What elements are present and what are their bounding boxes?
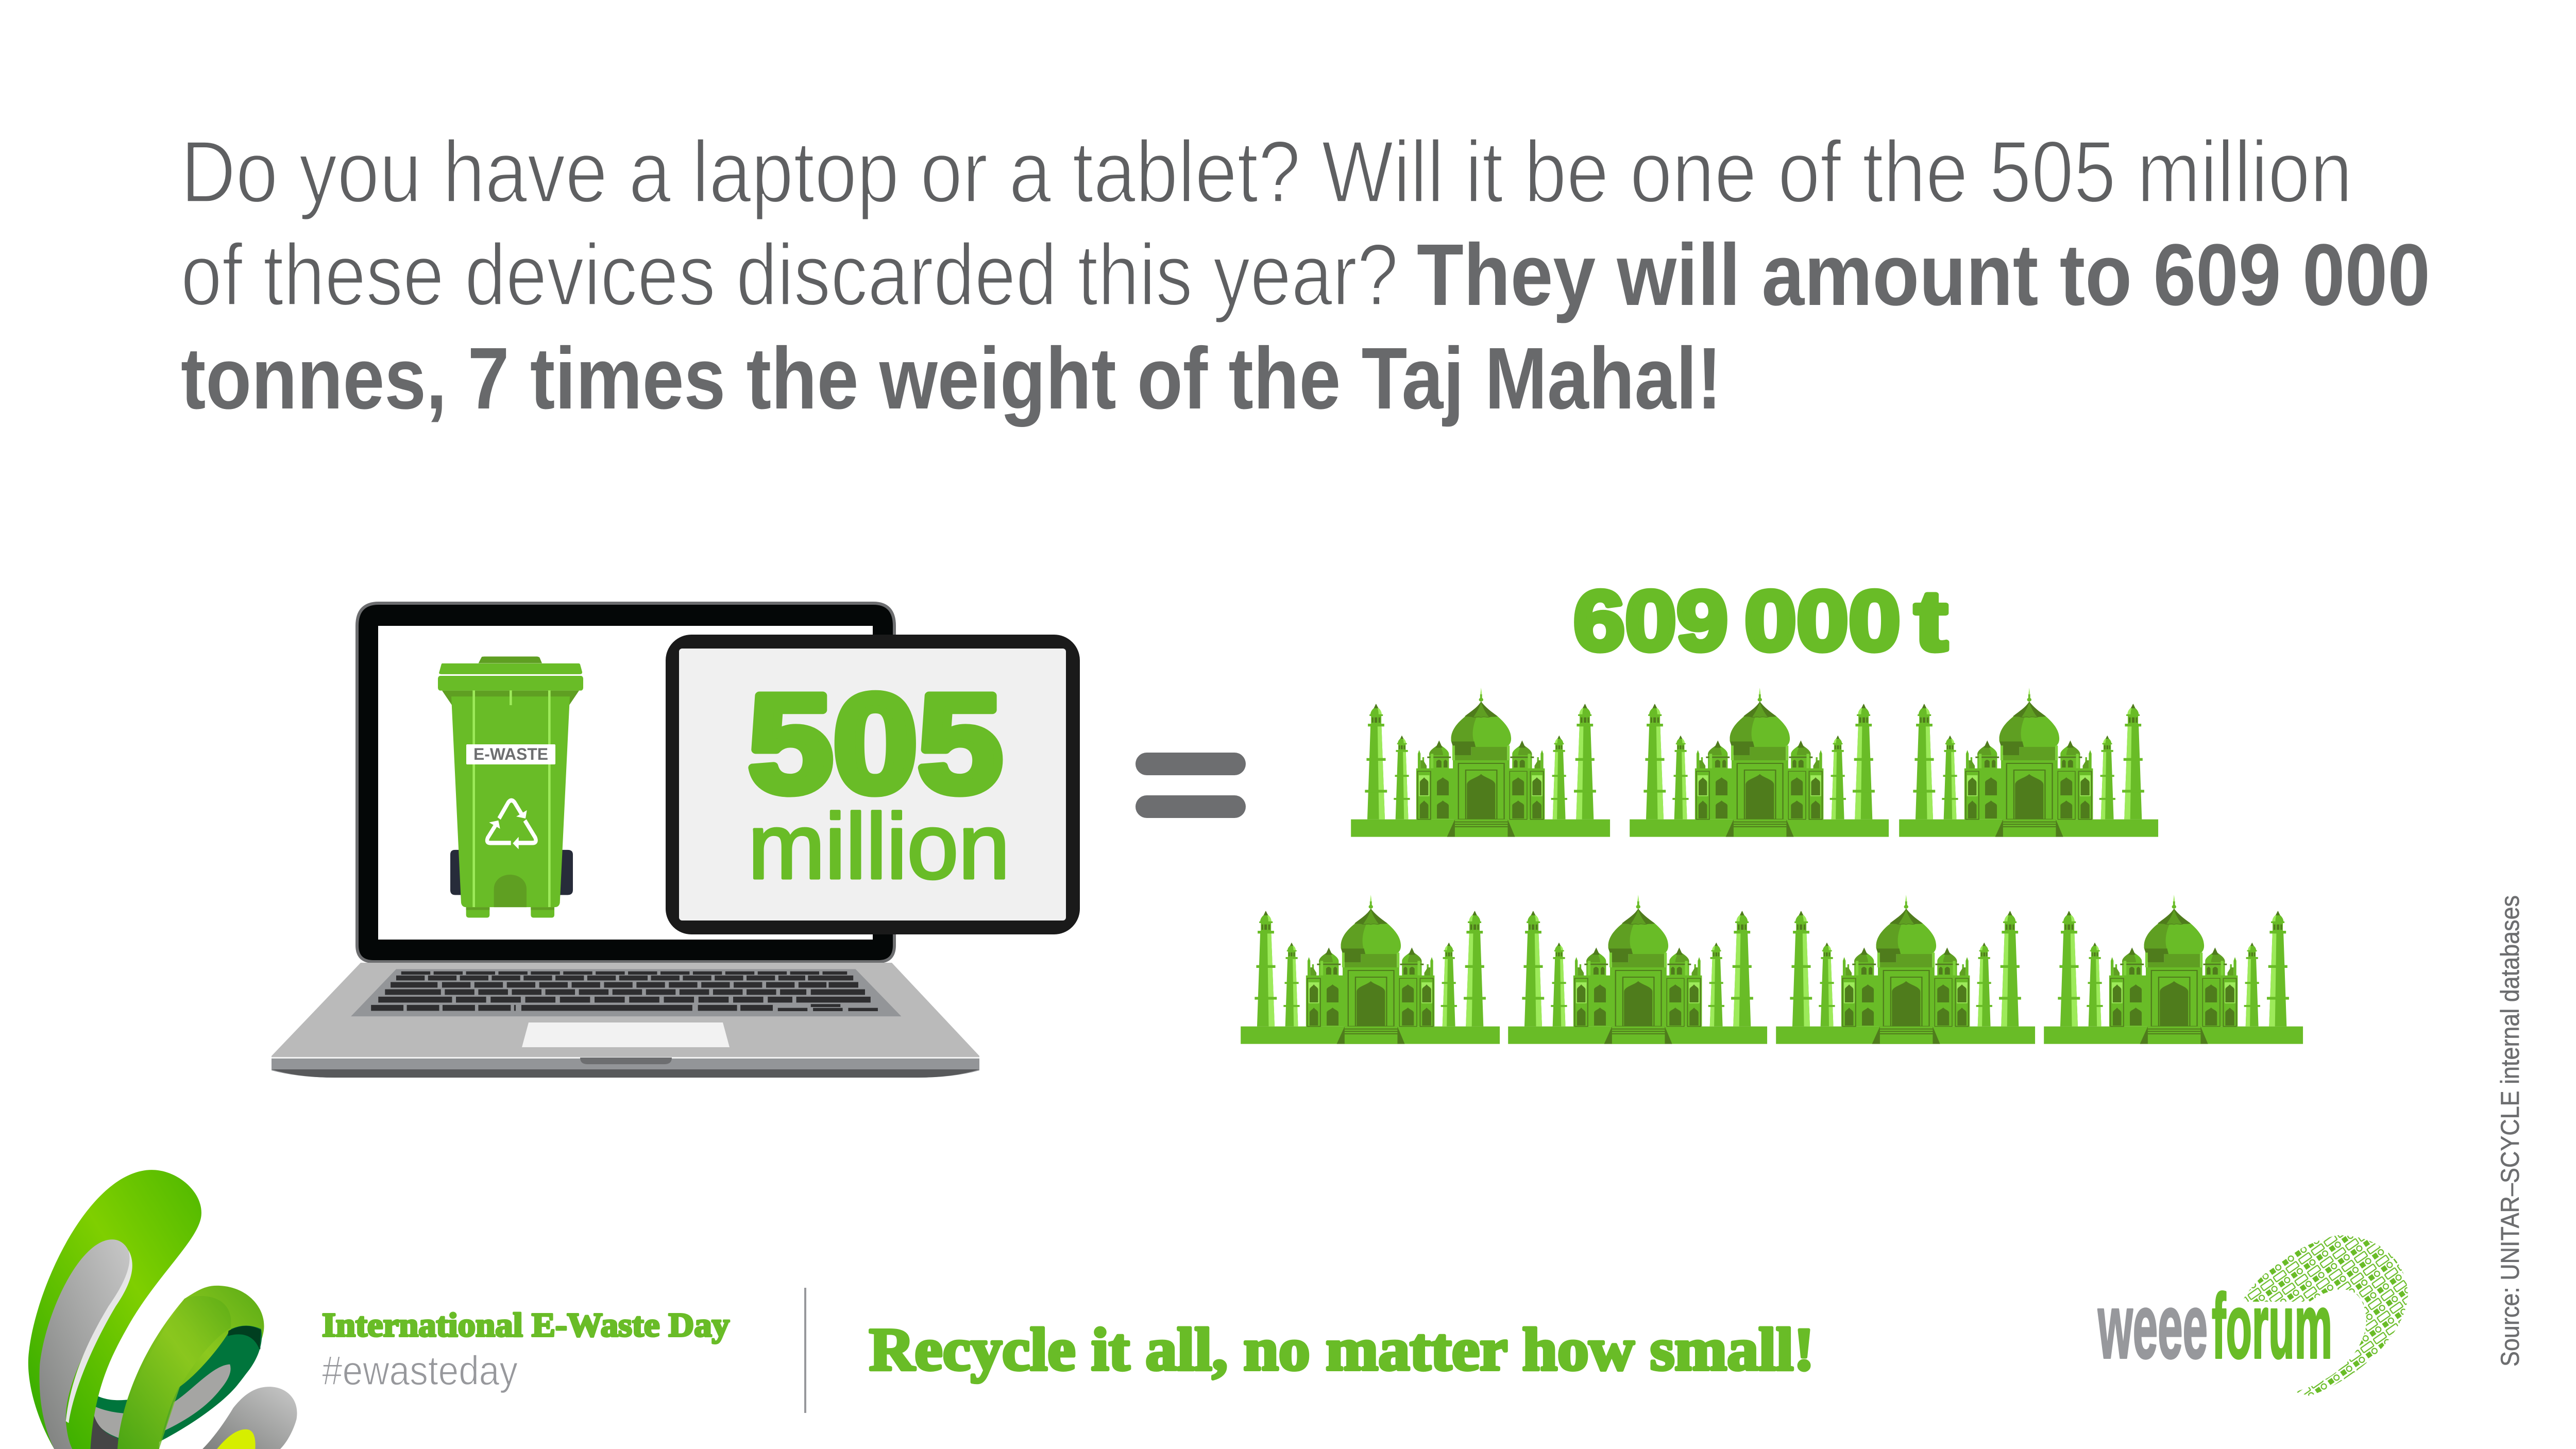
- laptop trackpad: [522, 1022, 730, 1047]
- icons: seven Taj Mahals: [1241, 688, 2303, 1044]
- logo: International E-Waste Day swirl: [28, 1170, 297, 1449]
- stat: 609 000 t: [1573, 573, 1947, 668]
- logo: WEEE Forum: weee: [2098, 1275, 2208, 1377]
- label: International E-Waste Day: International E-Waste Day: [322, 1306, 730, 1344]
- logo: WEEE Forum: [2098, 1235, 2408, 1396]
- weee forum swirl of devices: [2242, 1235, 2408, 1396]
- heading: laptop and tablet question: of these devices discarded this year?: [181, 226, 1398, 324]
- heading: laptop and tablet question: They will amount to 609 000: [1417, 226, 2430, 324]
- icon: e-waste bin: [438, 656, 583, 917]
- stat: 609 000 t: t: [1914, 573, 1947, 668]
- stat: 505: 505: [748, 666, 1003, 822]
- heading: laptop and tablet question: [181, 123, 2430, 428]
- stat label: million: million: [748, 795, 1010, 898]
- source note: Source: UNITAR–SCYCLE internal databases: [2496, 895, 2524, 1367]
- laptop keyboard: [351, 969, 901, 1016]
- logo: WEEE Forum: forum: [2212, 1275, 2332, 1377]
- label: hashtag: #ewasteday: [322, 1348, 518, 1393]
- heading: laptop and tablet question: tonnes, 7 times the weight of the Taj Mahal!: [181, 330, 1722, 428]
- stat: 609 000 t: 609: [1573, 573, 1728, 668]
- illustration: laptop: [272, 603, 979, 1078]
- slogan: Recycle it all, no matter how small!: [869, 1316, 1815, 1383]
- icon: e-waste bin: E-WASTE: [473, 745, 548, 763]
- divider: [804, 1288, 806, 1413]
- stat: 609 000 t: 000: [1744, 573, 1901, 668]
- equals sign: [1136, 753, 1246, 818]
- icon: recycling arrows: [487, 800, 536, 849]
- illustration: tablet with 505 million: [672, 641, 1074, 928]
